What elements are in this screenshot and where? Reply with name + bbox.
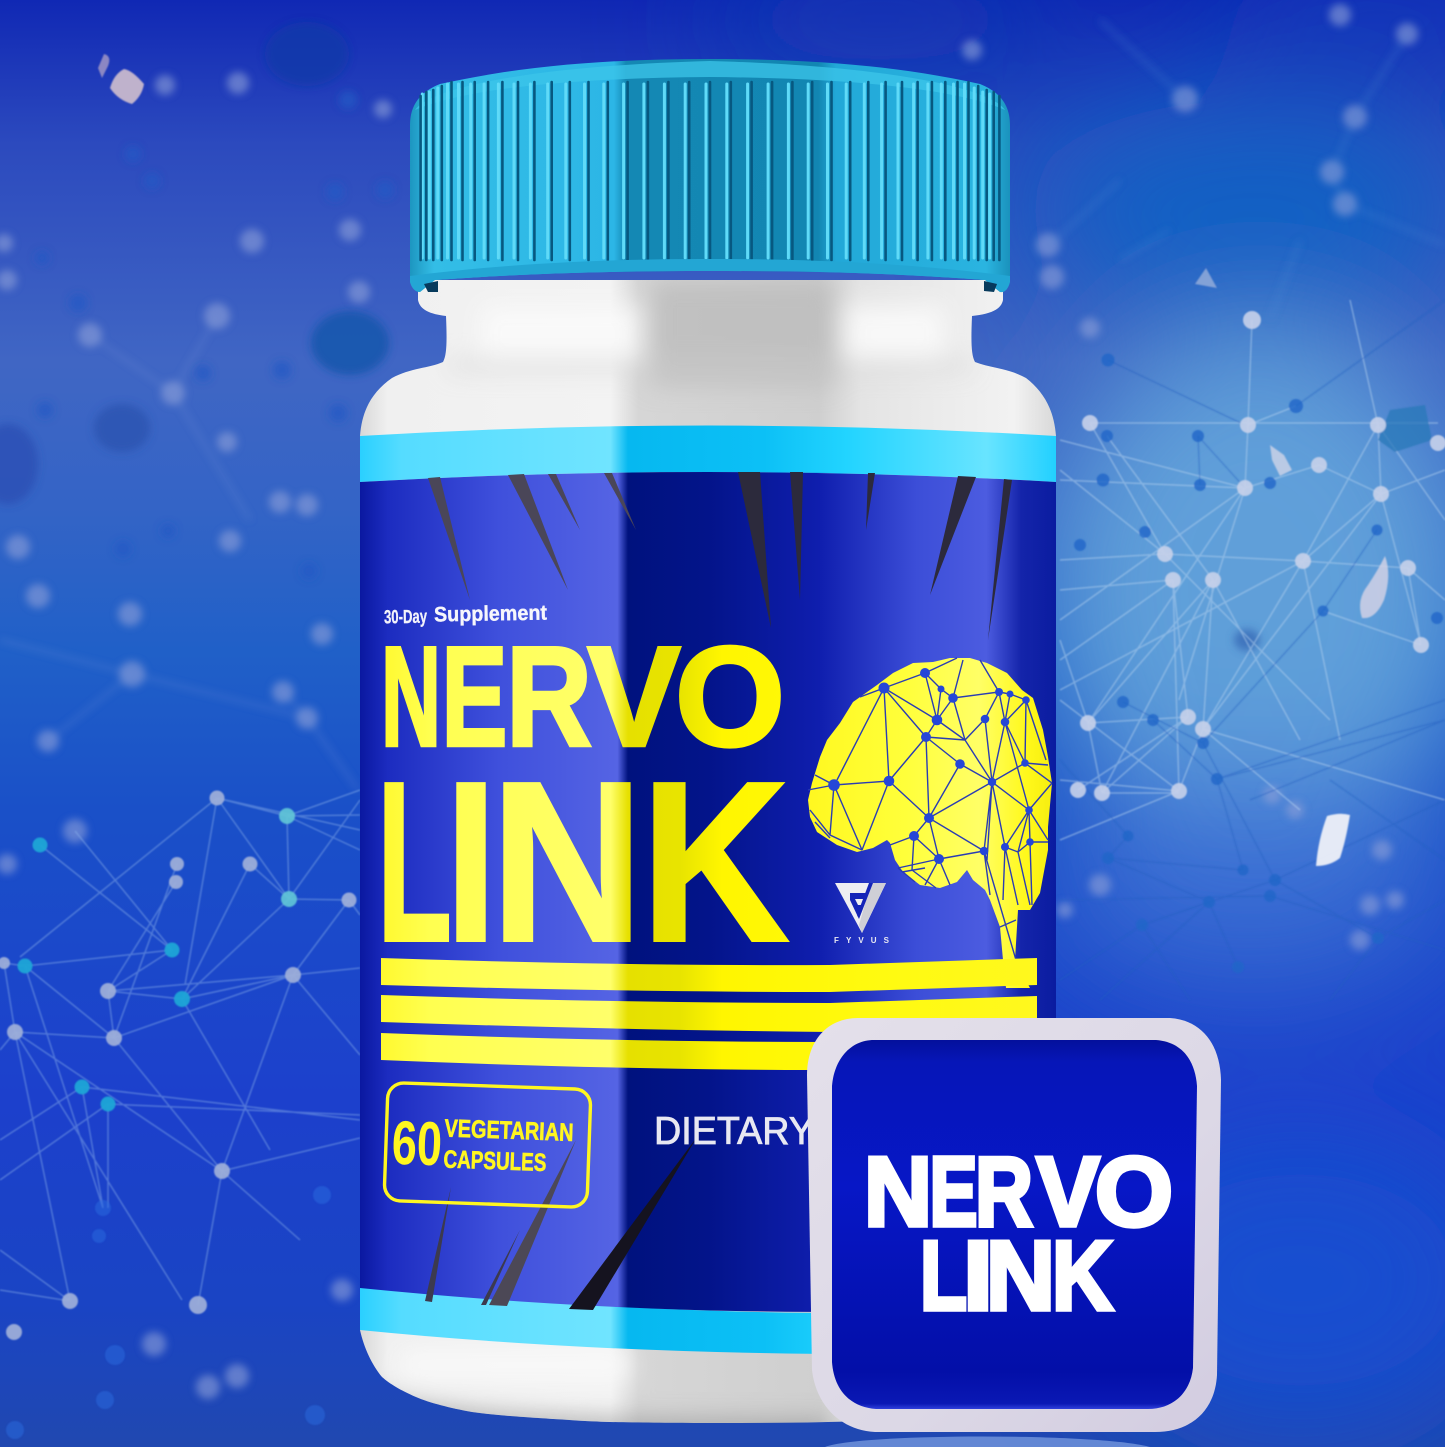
medallion text NERVO: V: [1036, 1136, 1100, 1246]
brand name NERVO: O: [675, 618, 785, 776]
medallion text LINK: I: [963, 1220, 993, 1330]
dietary text: DIETARY: [654, 1110, 814, 1153]
bottle cap: [410, 59, 1010, 292]
medallion reflection: [825, 1436, 1150, 1447]
top cyan band: [360, 426, 1056, 482]
supplement tagline: 30-Day: [384, 607, 428, 628]
medallion text NERVO: R: [975, 1136, 1033, 1246]
background: pale shards: [98, 54, 1388, 866]
bottle neck shading: [396, 280, 942, 1423]
brain network nodes: [828, 668, 1034, 864]
brand name LINK: I: [445, 736, 497, 990]
FYVUS logo: FYVUS: [834, 936, 890, 945]
medallion text NERVO: E: [930, 1136, 978, 1246]
background: network nodes left: [0, 790, 356, 1439]
cap top rim highlight: [415, 61, 1005, 110]
medallion outer frame: [807, 1018, 1221, 1432]
brand name LINK: L: [377, 736, 452, 990]
FYVUS logo: [834, 883, 890, 945]
cap lower rim: [410, 259, 1010, 292]
capsule text line 2: CAPSULES: [443, 1145, 547, 1177]
brand name LINK: N: [490, 736, 644, 990]
background: blurred dark blobs: [0, 22, 1260, 651]
background: network lines left: [0, 790, 360, 1305]
brand name NERVO: V: [588, 618, 680, 776]
medallion text NERVO: N: [864, 1136, 932, 1246]
brand name NERVO: R: [506, 618, 592, 776]
brain illustration: [808, 658, 1052, 988]
medallion text LINK: L: [920, 1220, 967, 1330]
brand name LINK: K: [641, 736, 789, 990]
capsule count 60: 60: [391, 1109, 443, 1179]
brain network lines: [808, 658, 1052, 960]
supplement tagline: [384, 602, 547, 628]
label panel: [360, 472, 1056, 1312]
medallion badge: [807, 1018, 1221, 1447]
capsule count badge: [384, 1082, 591, 1207]
medallion text LINK: N: [986, 1220, 1055, 1330]
label dark streaks: [425, 472, 1012, 1310]
cap ribs light: [422, 84, 990, 258]
supplement tagline: Supplement: [434, 602, 547, 627]
medallion inner panel: [832, 1040, 1197, 1409]
background: network right: [1060, 300, 1445, 1000]
bottle plastic body and neck: [360, 280, 1056, 1423]
cap corner shadows: [424, 281, 997, 292]
cap ribs dark: [421, 82, 999, 260]
cap shell: [410, 59, 1010, 292]
brand name NERVO: N: [381, 618, 441, 776]
medallion text LINK: K: [1052, 1220, 1113, 1330]
medallion text NERVO: O: [1095, 1136, 1173, 1246]
bottle: [360, 280, 1056, 1445]
brand name NERVO: E: [441, 618, 507, 776]
capsule text line 1: VEGETARIAN: [444, 1114, 574, 1147]
yellow stripes: [381, 958, 1037, 1070]
bottom cyan band: [360, 1286, 1056, 1354]
